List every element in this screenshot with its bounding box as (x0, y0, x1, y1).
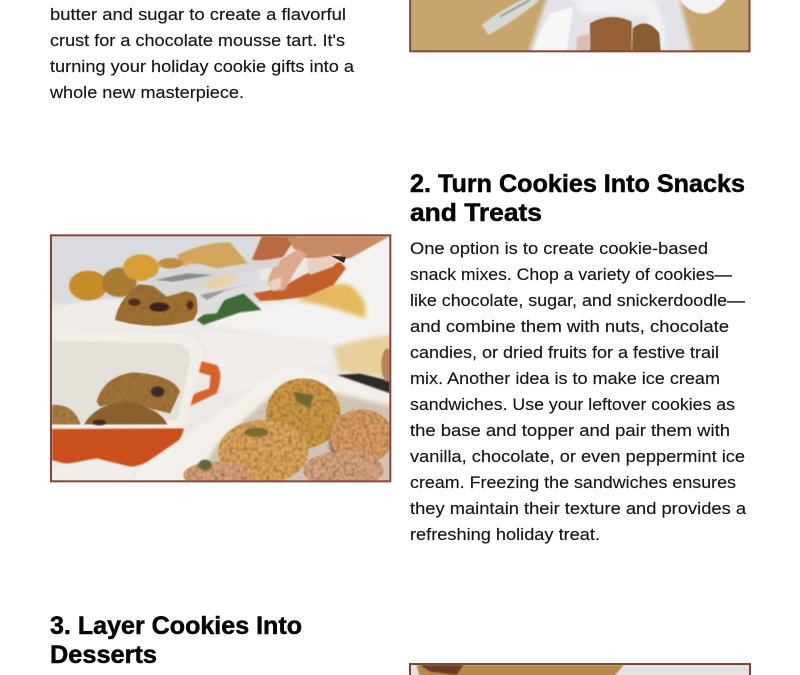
savory balls (183, 378, 393, 488)
heading: section 3: Desserts (50, 641, 157, 669)
text block: section 2 paragraph: sandwiches. Use your leftover cookies as (410, 395, 735, 414)
text block: section 2 paragraph (410, 239, 747, 544)
heading: section 2: 2. Turn Cookies Into Snacks (410, 170, 745, 198)
text block: section 2 paragraph: snack mixes. Chop a variety of cookies— (410, 265, 732, 284)
orange dish (52, 332, 220, 468)
heading: section 3: 3. Layer Cookies Into (50, 612, 302, 640)
black trivet edge (337, 374, 393, 394)
white dish (143, 374, 304, 465)
text block: section 2 paragraph: cream. Freezing the sandwiches ensures (410, 473, 736, 492)
text block: end of section 1 paragraph: butter and sugar to create a flavorful (50, 5, 346, 24)
text block: end of section 1 paragraph: whole new masterpiece. (49, 83, 244, 102)
heading: section 2 (410, 170, 745, 227)
photo: cookies in a glass jar with tongs (410, 0, 750, 53)
text block: section 2 paragraph: the base and topper and pair them with (410, 421, 730, 440)
photo: tongs lifting a cookie over baking dishes (47, 232, 397, 488)
photo: top edge of layered cookie dessert (410, 664, 750, 675)
text block: section 2 paragraph: vanilla, chocolate, or even peppermint ice (410, 447, 745, 466)
text block: section 2 paragraph: mix. Another idea is to make ice cream (410, 369, 720, 388)
text block: section 2 paragraph: and combine them with nuts, chocolate (410, 317, 729, 336)
hand (252, 236, 389, 301)
text block: end of section 1 paragraph: crust for a chocolate mousse tart. It's (50, 31, 345, 50)
heading: section 2: and Treats (410, 199, 542, 227)
text block: section 2 paragraph: candies, or dried fruits for a festive trail (410, 343, 719, 362)
tongs (146, 258, 280, 315)
heading: section 3 (50, 612, 302, 669)
text block: section 2 paragraph: refreshing holiday treat. (410, 525, 600, 544)
text block: section 2 paragraph: they maintain their texture and provides a (410, 499, 747, 518)
cookie held by tongs (115, 284, 198, 326)
text block: end of section 1 paragraph (49, 5, 355, 102)
text block: section 2 paragraph: like chocolate, sugar, and snickerdoodle— (410, 291, 745, 310)
paper under dishes (64, 457, 134, 470)
text block: section 2 paragraph: One option is to create cookie-based (410, 239, 708, 258)
background plate and blurred cookies (47, 232, 397, 395)
text block: end of section 1 paragraph: turning your holiday cookie gifts into a (50, 57, 355, 76)
